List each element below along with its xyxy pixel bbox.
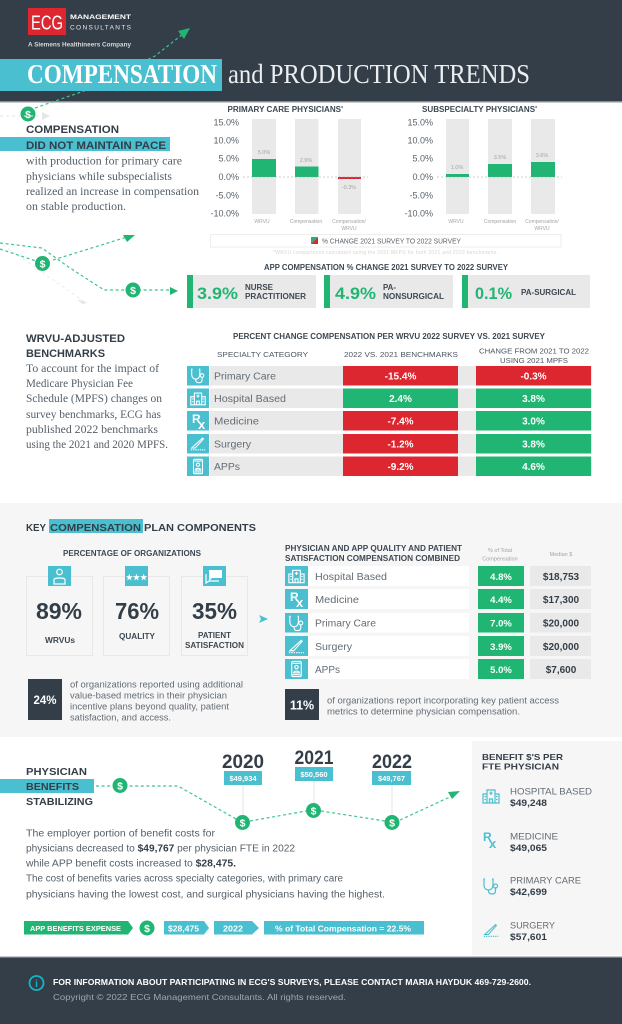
coin: start xyxy=(112,778,128,793)
bars xyxy=(243,119,368,214)
heading: compensation did not maintain pace: DID NOT MAINTAIN PACE xyxy=(26,140,166,152)
row: surgery: Surgery xyxy=(315,642,352,653)
card: quality: ★★★ xyxy=(126,573,148,582)
heading: physician benefits stabilizing xyxy=(0,766,94,808)
item: hospital based: $49,248 xyxy=(510,798,547,809)
icon: dollar coin mid left: $ xyxy=(40,258,46,270)
card: nurse practitioner: NURSE xyxy=(245,283,274,292)
row: primary care xyxy=(187,366,592,386)
row: medicine xyxy=(285,589,591,610)
heading xyxy=(26,519,256,534)
axis labels: 10.0% xyxy=(213,136,239,146)
axis labels: 0.0% xyxy=(412,172,433,182)
card: pa-surgical xyxy=(462,275,590,308)
callout: 11%: metrics to determine physician compensation. xyxy=(327,706,520,716)
category labels: WRVU xyxy=(341,226,357,232)
row: apps: -9.2% xyxy=(387,462,414,473)
heading: COMPENSATION xyxy=(50,522,141,534)
axis labels: -10.0% xyxy=(210,208,239,218)
category labels xyxy=(448,219,559,232)
logo: MANAGEMENT xyxy=(70,14,131,21)
axis labels xyxy=(210,117,239,218)
card: patient satisfaction xyxy=(182,566,248,656)
table heading: quality and patient satisfaction xyxy=(285,544,462,563)
text block: wrvu intro: survey benchmarks, ECG has xyxy=(26,409,162,421)
data point: 2020 xyxy=(222,752,264,830)
text block: compensation intro xyxy=(26,156,199,213)
column headers: Compensation xyxy=(482,556,518,562)
row: primary care: Primary Care xyxy=(315,618,376,630)
panel heading xyxy=(482,752,563,772)
row: hospital based: Hospital Based xyxy=(214,394,286,405)
row: medicine: R xyxy=(192,412,201,426)
card: nurse practitioner: 3.9% xyxy=(197,284,238,303)
row: hospital based: Hospital Based xyxy=(315,572,387,583)
column headers: % of Total xyxy=(488,548,512,554)
item: medicine: R xyxy=(483,830,492,844)
item: surgery: $57,601 xyxy=(510,932,548,943)
value labels: 3.6% xyxy=(536,153,548,159)
icon: dollar coin mid right: $ xyxy=(130,285,136,297)
row: primary care: Primary Care xyxy=(214,372,276,382)
callout: 24%: value-based metrics in their physician xyxy=(70,690,227,700)
text block: wrvu intro: To account for the impact of xyxy=(26,363,159,375)
axis labels: 5.0% xyxy=(218,154,239,164)
arrow: top growth line xyxy=(35,28,190,108)
text block: benefit costs xyxy=(25,828,385,900)
table: percent change compensation per wrvu xyxy=(187,332,592,476)
logo xyxy=(28,8,132,48)
value labels: -0.3% xyxy=(342,185,356,191)
row: medicine: Medicine xyxy=(315,595,359,606)
item: primary care: PRIMARY CARE xyxy=(510,876,581,886)
heading: app compensation: APP COMPENSATION % CHANGE 2021 SURVEY TO 2022 SURVEY xyxy=(264,263,509,272)
value labels: 5.0% xyxy=(258,150,270,156)
axis labels: -5.0% xyxy=(409,190,433,200)
card: nurse practitioner xyxy=(187,275,316,308)
value labels: 2.9% xyxy=(300,158,312,164)
heading: wrvu-adjusted benchmarks: WRVU-ADJUSTED xyxy=(26,333,125,345)
heading: KEY xyxy=(26,522,46,534)
item: medicine: x xyxy=(489,836,497,851)
text block: wrvu intro: Schedule (MPFS) changes on xyxy=(26,393,162,405)
column headers: Median $ xyxy=(550,552,572,558)
row: apps: 5.0% xyxy=(490,665,512,676)
heading: compensation did not maintain pace xyxy=(0,124,170,152)
axis labels: -5.0% xyxy=(215,190,239,200)
item: surgery: SURGERY xyxy=(510,920,556,932)
data point: 2022: $49,767 xyxy=(378,774,405,783)
row: surgery: $20,000 xyxy=(543,642,580,653)
text block: compensation intro: physicians while subspecialists xyxy=(26,171,173,183)
data point: 2020: $49,934 xyxy=(229,774,257,783)
heading: compensation did not maintain pace: COMPENSATION xyxy=(26,124,119,136)
row: medicine: x xyxy=(198,417,206,432)
row: primary care: -0.3% xyxy=(520,372,547,382)
data point: 2022: 2022 xyxy=(372,752,412,773)
text block: wrvu intro: published 2022 benchmarks xyxy=(26,424,159,436)
text block: compensation intro: realized an increase in compensation xyxy=(26,186,199,198)
data point: 2022: $ xyxy=(389,818,395,830)
axis labels: 15.0% xyxy=(213,117,239,127)
item: hospital based xyxy=(483,786,592,809)
row: medicine: 4.4% xyxy=(490,595,512,606)
axis labels: 0.0% xyxy=(218,172,239,182)
callout: 24%: of organizations reported using additional xyxy=(70,680,243,690)
row: medicine: -7.4% xyxy=(387,416,414,428)
row: surgery: -1.2% xyxy=(387,440,414,450)
callout: 11% xyxy=(285,689,560,720)
row: apps: 4.6% xyxy=(522,462,545,473)
row: primary care xyxy=(285,613,591,632)
column headers xyxy=(217,346,589,365)
card: patient satisfaction: 35% xyxy=(192,598,237,624)
value labels: 1.0% xyxy=(451,165,463,171)
chart title: PRIMARY CARE PHYSICIANS' xyxy=(228,105,343,114)
card: wrvus: 89% xyxy=(36,598,82,624)
faint arrow xyxy=(0,112,50,120)
share of compensation: % of Total Compensation = 22.5% xyxy=(275,924,411,934)
share of compensation xyxy=(264,921,424,934)
legend xyxy=(210,234,561,247)
contact line: FOR INFORMATION ABOUT PARTICIPATING IN ECG'S SURVEYS, PLEASE CONTACT MARIA HAYDUK 469-729-2600. xyxy=(53,977,531,987)
arrows: mid growth lines xyxy=(0,235,178,304)
card: patient satisfaction: SATISFACTION xyxy=(185,641,244,650)
axis labels: 10.0% xyxy=(407,136,433,146)
card: pa-nonsurgical: NONSURGICAL xyxy=(383,292,444,301)
item: hospital based: HOSPITAL BASED xyxy=(510,786,592,798)
row: hospital based: 3.8% xyxy=(522,394,545,405)
axis labels: 15.0% xyxy=(407,117,433,127)
callout: 24% xyxy=(28,679,243,722)
data point: 2022 xyxy=(372,752,412,830)
panel: benefit dollars per fte physician xyxy=(472,741,622,955)
row: hospital based: 4.8% xyxy=(490,572,512,583)
title: and PRODUCTION TRENDS xyxy=(228,59,530,89)
row: apps: APPs xyxy=(214,462,240,473)
heading: physician benefits stabilizing: STABILIZING xyxy=(26,796,93,808)
icon: dollar coin top: $ xyxy=(25,109,31,121)
category labels: Compensation xyxy=(290,219,322,225)
text block: benefit costs: physicians decreased to $49,767 per physician FTE in 2022 xyxy=(26,844,295,854)
footnote: *WRVU comparisons calculated using the 2021 MFPS for both 2021 and 2022 benchmarks. xyxy=(273,250,498,256)
heading: physician benefits stabilizing: PHYSICIAN xyxy=(26,766,87,778)
item: surgery xyxy=(484,920,556,943)
trend line xyxy=(96,786,460,821)
card: pa-nonsurgical xyxy=(324,275,453,308)
icon: info: i xyxy=(35,979,38,990)
table heading: quality and patient satisfaction: SATISFACTION COMPENSATION COMBINED xyxy=(285,554,460,563)
text block: benefit costs: The employer portion of benefit costs for xyxy=(26,828,216,840)
chart: subspecialty physicians xyxy=(404,105,562,232)
card: pa-surgical: 0.1% xyxy=(475,284,512,303)
item: medicine: $49,065 xyxy=(510,843,548,854)
row: medicine xyxy=(187,411,592,432)
row: surgery: 3.8% xyxy=(522,440,545,450)
subheading: PERCENTAGE OF ORGANIZATIONS xyxy=(63,549,202,558)
data point: 2021: 2021 xyxy=(294,748,334,769)
text block: wrvu intro: using the 2021 and 2020 MPFS. xyxy=(26,439,168,451)
icon: info xyxy=(30,976,44,990)
heading: physician benefits stabilizing: BENEFITS xyxy=(26,781,79,793)
callout: 11%: of organizations report incorporating key patient access xyxy=(327,696,560,706)
row: surgery: Surgery xyxy=(214,440,251,450)
label: APP BENEFITS EXPENSE xyxy=(30,924,121,933)
chart title: SUBSPECIALTY PHYSICIANS' xyxy=(422,105,537,114)
column headers: 2022 VS. 2021 BENCHMARKS xyxy=(344,350,458,359)
text block: benefit costs: physicians having the lowest cost, and surgical physicians having the highest. xyxy=(26,890,385,900)
amount: $28,475 xyxy=(168,924,199,934)
row: medicine: 3.0% xyxy=(522,416,545,428)
row: hospital based xyxy=(285,566,591,586)
column headers: SPECIALTY CATEGORY xyxy=(217,350,308,359)
table title: PERCENT CHANGE COMPENSATION PER WRVU 2022 SURVEY VS. 2021 SURVEY xyxy=(233,332,546,341)
data point: 2021: $ xyxy=(311,806,317,818)
text block: benefit costs: The cost of benefits varies across specialty categories, with primary care xyxy=(26,874,343,884)
category labels: Compensation xyxy=(484,219,516,225)
header band xyxy=(0,0,622,102)
heading: wrvu-adjusted benchmarks xyxy=(26,333,125,360)
year xyxy=(214,921,259,934)
panel heading: BENEFIT $'S PER xyxy=(482,752,563,762)
card: wrvus xyxy=(26,566,92,656)
card: patient satisfaction: PATIENT xyxy=(198,631,231,640)
row: apps xyxy=(285,659,591,679)
coin xyxy=(140,920,154,936)
logo: A Siemens Healthineers Company xyxy=(28,42,131,48)
card: quality: 76% xyxy=(115,598,159,624)
legend: % CHANGE 2021 SURVEY TO 2022 SURVEY xyxy=(322,238,461,246)
row: medicine: $17,300 xyxy=(543,595,580,606)
category labels xyxy=(254,219,366,232)
text block: compensation intro: with production for primary care xyxy=(26,156,182,168)
footer xyxy=(0,956,622,1024)
text block: wrvu intro xyxy=(26,363,168,451)
card: quality xyxy=(104,566,170,656)
row: hospital based: 2.4% xyxy=(389,394,412,405)
bars xyxy=(437,119,562,214)
label xyxy=(24,921,133,934)
heading: PLAN COMPONENTS xyxy=(144,522,256,534)
text block: wrvu intro: Medicare Physician Fee xyxy=(26,378,133,390)
logo: ECG xyxy=(31,12,63,34)
app benefits expense strip xyxy=(24,920,424,936)
item: medicine: MEDICINE xyxy=(510,832,558,842)
title xyxy=(0,59,530,91)
value labels: 3.5% xyxy=(494,155,506,161)
title: COMPENSATION xyxy=(27,59,217,89)
row: medicine: x xyxy=(296,595,304,610)
category labels: WRVU xyxy=(534,226,550,232)
row: apps: $7,600 xyxy=(546,665,577,676)
row: hospital based xyxy=(187,388,592,408)
copyright: Copyright © 2022 ECG Management Consultants. All rights reserved. xyxy=(53,992,346,1002)
year: 2022 xyxy=(223,924,243,934)
axis labels: 5.0% xyxy=(412,154,433,164)
value labels xyxy=(258,150,356,191)
table heading: quality and patient satisfaction: PHYSICIAN AND APP QUALITY AND PATIENT xyxy=(285,544,462,553)
row: surgery xyxy=(187,434,592,454)
data point: 2020: 2020 xyxy=(222,752,264,773)
row: surgery: 3.9% xyxy=(490,642,512,653)
callout: 11%: 11% xyxy=(290,698,314,712)
row: primary care: 7.0% xyxy=(490,618,512,630)
item: medicine xyxy=(483,830,558,854)
value labels xyxy=(451,153,548,171)
data point: 2020: $ xyxy=(240,818,246,830)
arrow: to combined table xyxy=(259,615,268,623)
row: primary care: -15.4% xyxy=(385,372,416,382)
icon: dollar coin mid right xyxy=(126,282,140,298)
icon: dollar coin top xyxy=(20,106,36,122)
category labels: Compensation/ xyxy=(525,219,559,225)
category labels: WRVU xyxy=(254,219,270,225)
icon: dollar coin mid left xyxy=(35,256,50,271)
column headers: CHANGE FROM 2021 TO 2022 xyxy=(479,346,589,356)
logo: CONSULTANTS xyxy=(70,24,132,32)
axis labels xyxy=(404,117,433,218)
axis labels: -10.0% xyxy=(404,208,433,218)
text block: compensation intro: on stable production. xyxy=(26,201,126,213)
item: primary care xyxy=(484,876,581,898)
card: wrvus: WRVUs xyxy=(45,636,76,645)
category labels: WRVU xyxy=(448,219,464,225)
row: apps xyxy=(187,456,592,476)
card: quality: QUALITY xyxy=(119,632,156,641)
item: primary care: $42,699 xyxy=(510,887,547,898)
card: pa-surgical: PA-SURGICAL xyxy=(521,288,576,297)
data point: 2021 xyxy=(294,748,334,818)
row: medicine: Medicine xyxy=(214,416,259,428)
column headers xyxy=(482,548,572,562)
row: hospital based: $18,753 xyxy=(543,572,580,583)
row: medicine: R xyxy=(290,590,299,604)
column headers: USING 2021 MPFS xyxy=(500,356,568,365)
row: apps: APPs xyxy=(315,665,340,676)
panel heading: FTE PHYSICIAN xyxy=(482,762,559,772)
amount xyxy=(164,921,209,934)
row: surgery xyxy=(285,636,591,656)
coin: start: $ xyxy=(117,780,123,792)
card: pa-nonsurgical: PA- xyxy=(383,283,396,292)
chart: primary care physicians xyxy=(210,105,368,232)
coin: $ xyxy=(144,923,150,935)
panel: key compensation plan components xyxy=(0,503,622,737)
category labels: Compensation/ xyxy=(332,219,366,225)
callout: 24%: satisfaction, and access. xyxy=(70,712,171,722)
callout: 24%: 24% xyxy=(33,695,57,707)
card: pa-nonsurgical: 4.9% xyxy=(335,284,376,303)
card: nurse practitioner: PRACTITIONER xyxy=(245,292,306,301)
data point: 2021: $50,560 xyxy=(300,770,328,779)
callout: 24%: incentive plans beyond quality, patient xyxy=(70,702,230,712)
line chart: benefit costs by year xyxy=(96,748,460,830)
text block: benefit costs: while APP benefit costs increased to $28,475. xyxy=(25,858,236,870)
row: primary care: $20,000 xyxy=(543,618,580,630)
heading: wrvu-adjusted benchmarks: BENCHMARKS xyxy=(26,348,105,360)
